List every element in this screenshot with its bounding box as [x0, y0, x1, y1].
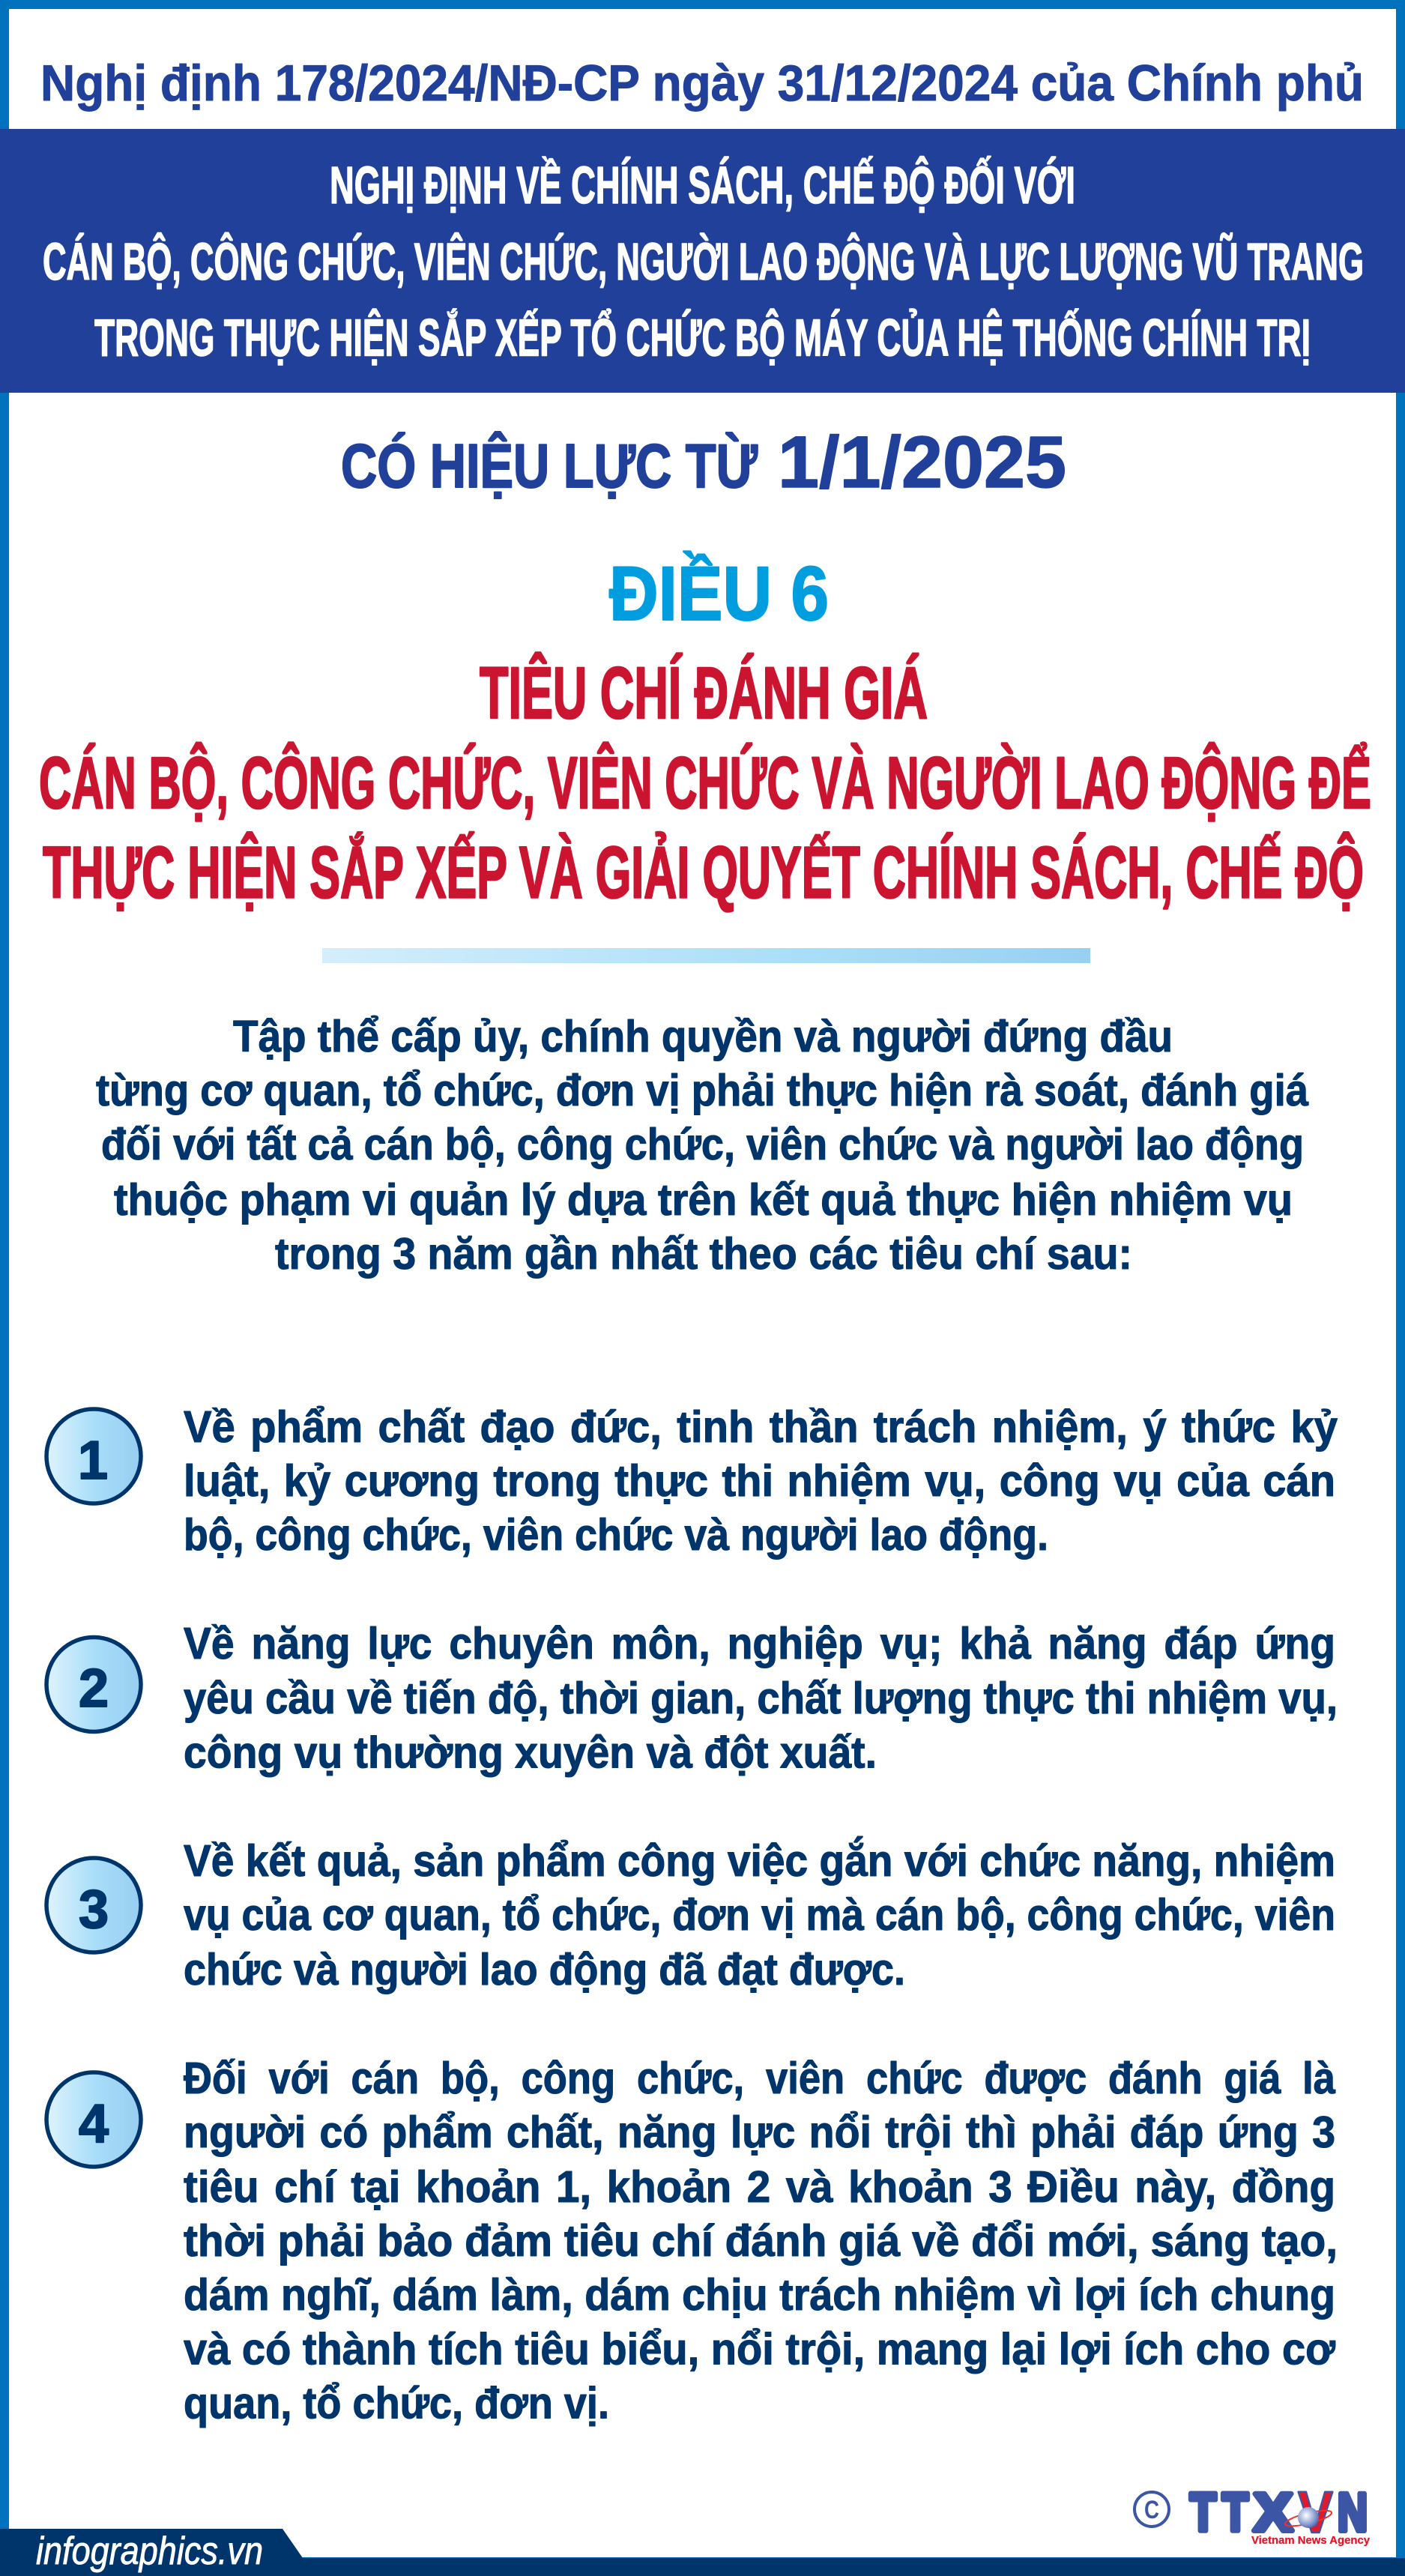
effective date: 1/1/2025	[778, 421, 1066, 503]
article heading	[39, 652, 1371, 913]
intro paragraph: Tập thể cấp ủy, chính quyền và người đứng đầu	[233, 1012, 1173, 1061]
criterion 4 text: tiêu chí tại khoản 1, khoản 2 và khoản 3 Điều này, đồng	[184, 2162, 1335, 2212]
source line: Nghị định 178/2024/NĐ-CP ngày 31/12/2024 của Chính phủ	[40, 55, 1364, 112]
TTXVN logo	[1190, 2479, 1371, 2547]
criterion 2 text: Về năng lực chuyên môn, nghiệp vụ; khả năng đáp ứng	[184, 1619, 1335, 1668]
criterion 3	[46, 1836, 1335, 1994]
intro paragraph: thuộc phạm vi quản lý dựa trên kết quả thực hiện nhiệm vụ	[114, 1175, 1293, 1225]
intro paragraph: trong 3 năm gần nhất theo các tiêu chí sau:	[275, 1229, 1132, 1279]
number badge 4	[46, 2072, 141, 2167]
criterion 4 text	[184, 2054, 1338, 2428]
number badge 4: 4	[79, 2094, 109, 2154]
website label: infographics.vn	[36, 2530, 263, 2573]
gradient divider bar	[322, 948, 1090, 963]
criterion 1 text: Về phẩm chất đạo đức, tinh thần trách nhiệm, ý thức kỷ	[184, 1402, 1338, 1452]
effective date	[341, 421, 1066, 503]
criterion 2 text: yêu cầu về tiến độ, thời gian, chất lượng thực thi nhiệm vụ,	[184, 1674, 1338, 1723]
intro paragraph: đối với tất cả cán bộ, công chức, viên chức và người lao động	[101, 1120, 1304, 1169]
effective date: CÓ HIỆU LỰC TỪ	[341, 431, 758, 501]
article heading: TIÊU CHÍ ĐÁNH GIÁ	[480, 652, 928, 734]
icon: copyright: C	[1144, 2496, 1159, 2524]
footer band	[0, 2529, 1405, 2576]
criterion 2 text	[184, 1619, 1338, 1778]
TTXVN logo: T	[1190, 2484, 1216, 2542]
criterion 4 text: và có thành tích tiêu biểu, nổi trội, mang lại lợi ích cho cơ	[184, 2325, 1335, 2374]
number badge 1	[46, 1409, 141, 1503]
criterion 1 text: luật, kỷ cương trong thực thi nhiệm vụ, công vụ của cán	[184, 1456, 1335, 1506]
criterion 4 text: quan, tổ chức, đơn vị.	[184, 2379, 609, 2428]
panel: decree title band	[0, 129, 1405, 393]
criterion 3 text: chức và người lao động đã đạt được.	[184, 1945, 905, 1994]
TTXVN logo: T	[1222, 2484, 1248, 2542]
article number: ĐIỀU 6	[609, 551, 829, 636]
TTXVN logo: Vietnam News Agency	[1251, 2534, 1371, 2547]
TTXVN logo: V	[1298, 2479, 1333, 2545]
number badge 1: 1	[78, 1431, 108, 1491]
criterion 3 text	[184, 1836, 1335, 1994]
intro paragraph: từng cơ quan, tổ chức, đơn vị phải thực hiện rà soát, đánh giá	[96, 1066, 1308, 1115]
criterion 1 text	[184, 1402, 1338, 1560]
TTXVN logo: X	[1254, 2484, 1293, 2542]
criterion 3 text: Về kết quả, sản phẩm công việc gắn với chức năng, nhiệm	[184, 1836, 1335, 1886]
criterion 4 text: dám nghĩ, dám làm, dám chịu trách nhiệm vì lợi ích chung	[184, 2270, 1335, 2320]
criterion 4	[46, 2054, 1338, 2428]
number badge 2: 2	[79, 1659, 109, 1719]
criterion 4 text: người có phẩm chất, năng lực nổi trội thì phải đáp ứng 3	[184, 2108, 1335, 2157]
intro paragraph	[96, 1012, 1308, 1279]
number badge 3: 3	[79, 1880, 109, 1940]
icon: copyright	[1134, 2492, 1169, 2527]
criterion 2	[46, 1619, 1338, 1778]
criterion 2 text: công vụ thường xuyên và đột xuất.	[184, 1728, 877, 1778]
number badge 3	[46, 1858, 141, 1952]
criterion 4 text: thời phải bảo đảm tiêu chí đánh giá về đổi mới, sáng tạo,	[184, 2216, 1338, 2266]
criterion 1 text: bộ, công chức, viên chức và người lao động.	[184, 1510, 1048, 1560]
TTXVN logo: N	[1338, 2484, 1368, 2542]
criterion 1	[46, 1402, 1338, 1560]
number badge 2	[46, 1637, 141, 1731]
